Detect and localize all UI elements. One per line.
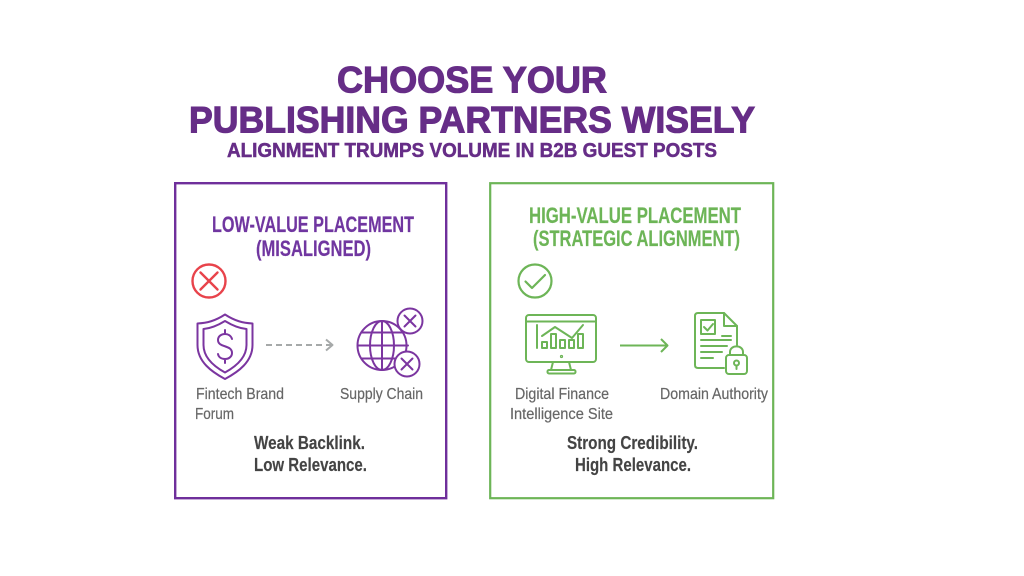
- label: Digital Finance Intelligence Site: [510, 386, 613, 423]
- subtitle: ALIGNMENT TRUMPS VOLUME IN B2B GUEST POSTS: [227, 140, 717, 162]
- heading: high-value placement: (STRATEGIC ALIGNMENT): [533, 226, 740, 251]
- icon: green check badge: [518, 264, 552, 298]
- label: Fintech Brand Forum: [195, 386, 284, 423]
- heading: low-value placement: [212, 212, 414, 261]
- heading: low-value placement: LOW-VALUE PLACEMENT: [212, 212, 414, 237]
- label: Domain Authority: Domain Authority: [660, 386, 768, 403]
- verdict: strong credibility: [567, 433, 698, 475]
- label: Digital Finance Intelligence Site: Intelligence Site: [510, 406, 613, 423]
- heading: high-value placement: HIGH-VALUE PLACEMENT: [529, 203, 741, 228]
- icon: red cross badge: [192, 264, 226, 298]
- verdict: weak backlink: [254, 433, 367, 475]
- label: Fintech Brand Forum: Fintech Brand: [196, 386, 284, 403]
- label: Digital Finance Intelligence Site: Digital Finance: [515, 386, 609, 403]
- verdict: weak backlink: Low Relevance.: [254, 455, 367, 475]
- arrow: dashed grey: [266, 340, 332, 350]
- verdict: strong credibility: Strong Credibility.: [567, 433, 698, 453]
- verdict: strong credibility: High Relevance.: [575, 455, 691, 475]
- label: Supply Chain: Supply Chain: [340, 386, 423, 403]
- icon: document with lock: [695, 313, 747, 374]
- label: Fintech Brand Forum: Forum: [195, 406, 234, 423]
- panel frame: low-value: [175, 183, 446, 498]
- icon: monitor with chart: [526, 315, 596, 374]
- icon: shield with dollar sign: [198, 314, 252, 379]
- panel frame: high-value: [490, 183, 773, 498]
- title: PUBLISHING PARTNERS WISELY: [189, 100, 755, 140]
- arrow: solid green: [620, 339, 668, 352]
- panel: high-value placement: [490, 183, 773, 498]
- heading: low-value placement: (MISALIGNED): [256, 236, 371, 261]
- heading: high-value placement: [529, 203, 741, 251]
- panel: low-value placement: [175, 183, 446, 498]
- icon: globe with cross badges: [358, 308, 422, 376]
- title: [189, 60, 755, 140]
- title: CHOOSE YOUR: [337, 60, 607, 100]
- verdict: weak backlink: Weak Backlink.: [254, 433, 365, 453]
